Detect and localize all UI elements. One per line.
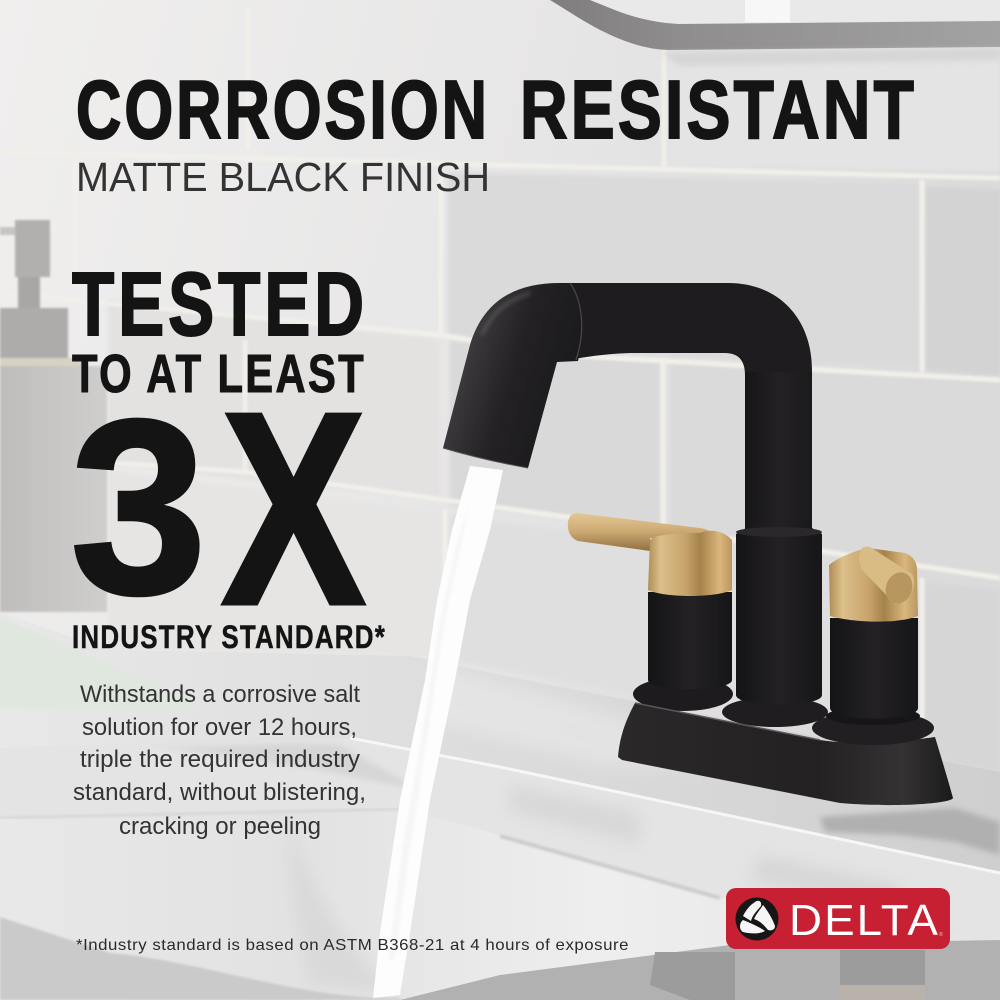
left handle [568, 513, 732, 689]
Delta logo [726, 888, 950, 949]
basin reflection bottom right [400, 940, 1000, 1000]
sink basin [0, 806, 1000, 1000]
footnote: *Industry standard is based on ASTM B368-21 at 4 hours of exposure [76, 937, 629, 954]
centre collar [722, 697, 828, 727]
base plate [618, 703, 953, 805]
subtitle: MATTE BLACK FINISH [76, 154, 490, 200]
description text: solution for over 12 hours, [82, 714, 357, 741]
description text: triple the required industry [80, 746, 361, 773]
counter back surface [0, 612, 1000, 880]
claim: tested to at least 3X industry standard: TESTED [72, 255, 368, 355]
green towel [0, 617, 205, 708]
faucet shadow on counter [820, 808, 1000, 855]
right collar [812, 707, 934, 745]
faucet spout and riser [443, 283, 812, 540]
left collar [633, 677, 733, 711]
soap dispenser [0, 220, 107, 612]
claim: tested to at least 3X industry standard: 3 [70, 368, 207, 646]
water stream [373, 466, 503, 998]
description text: Withstands a corrosive salt [80, 681, 360, 708]
right handle [829, 547, 918, 718]
counter front edge [0, 738, 1000, 940]
icon: delta triangle mark [736, 898, 778, 940]
claim: tested to at least 3X industry standard: INDUSTRY STANDARD* [72, 619, 386, 655]
tile wall background [0, 0, 1000, 800]
claim: tested to at least 3X industry standard: TO AT LEAST [72, 344, 366, 404]
title: CORROSION [76, 63, 490, 156]
Delta logo: DELTA [789, 896, 940, 945]
centre column [736, 520, 822, 705]
basin shadow bottom left [0, 917, 400, 1000]
faucet [443, 283, 953, 805]
Delta logo: ® [939, 931, 943, 938]
description text: standard, without blistering, [73, 779, 366, 806]
claim: tested to at least 3X industry standard [70, 255, 386, 661]
mirror frame [550, 0, 1000, 66]
claim: tested to at least 3X industry standard: X [222, 356, 366, 661]
title [76, 63, 917, 156]
description text: cracking or peeling [119, 813, 321, 840]
description text [73, 681, 366, 840]
